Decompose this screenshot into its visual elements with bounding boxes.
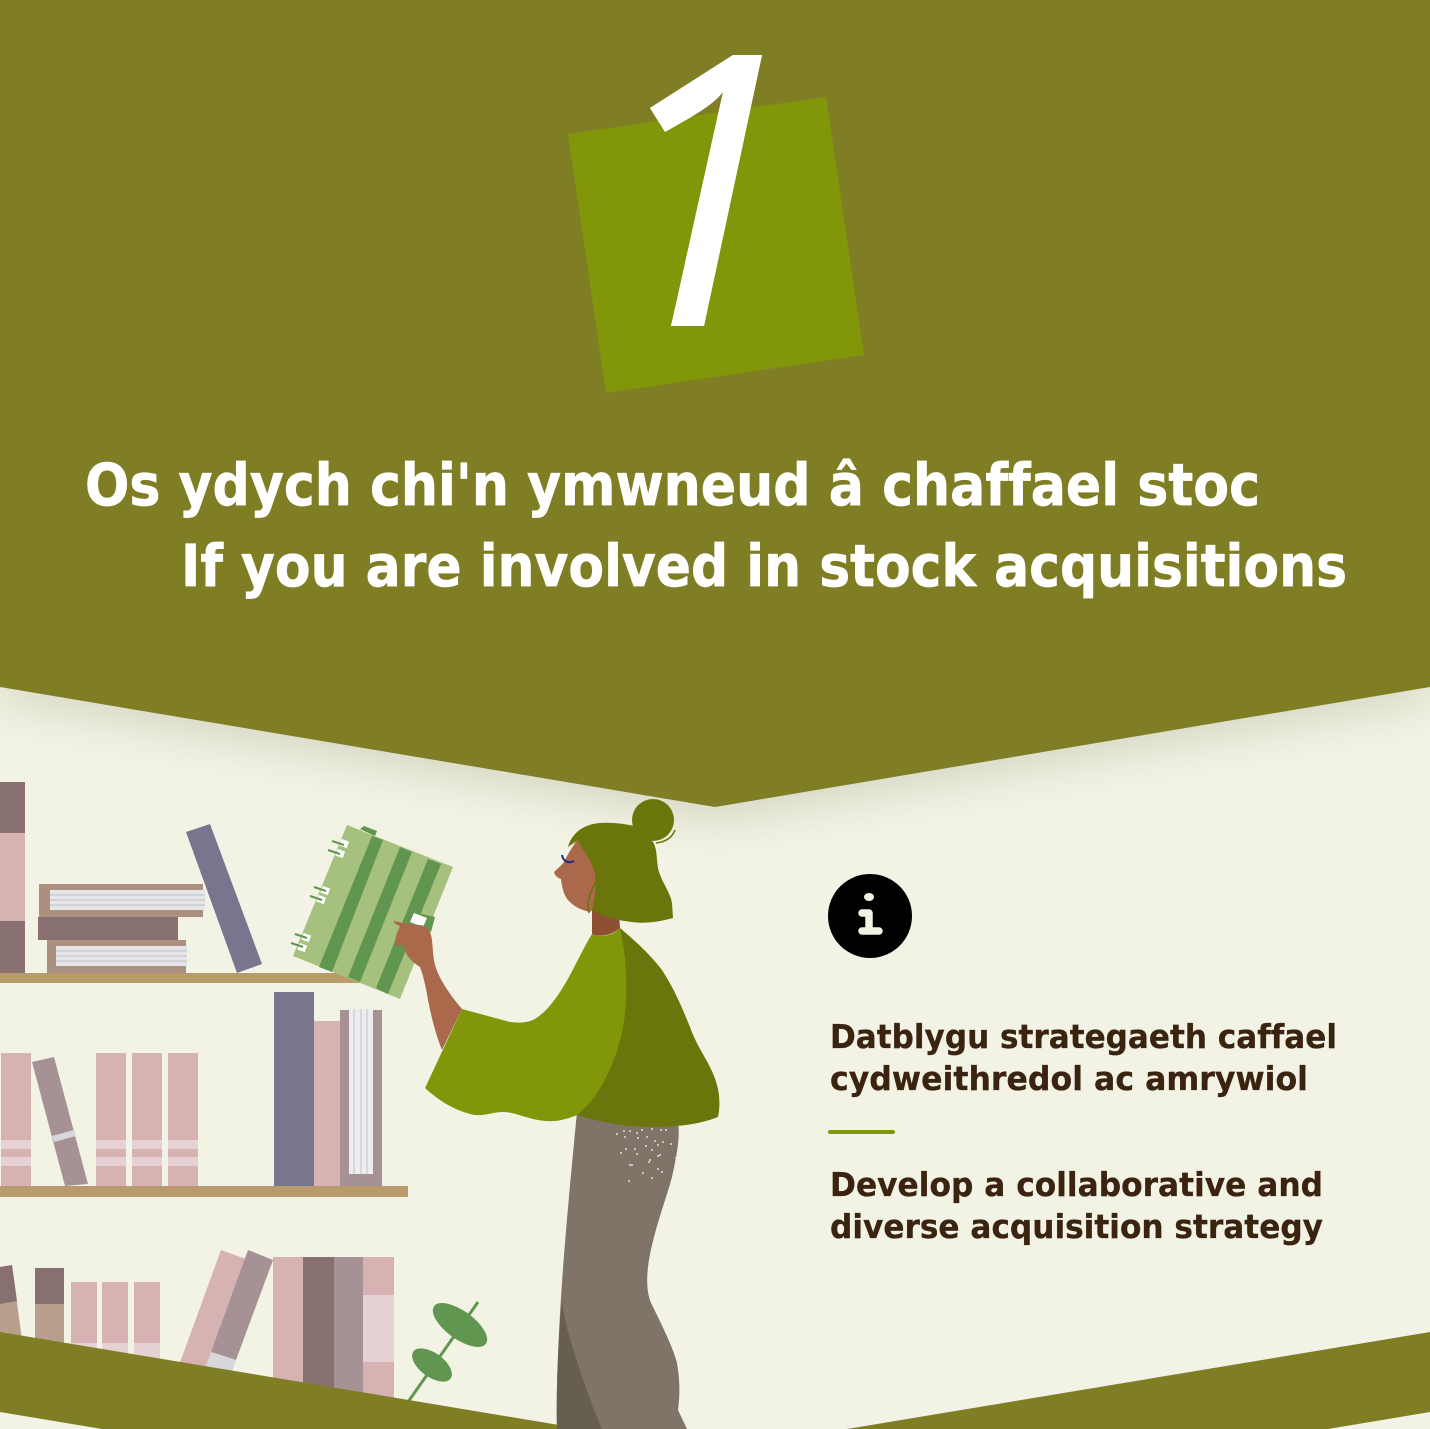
number square [568,97,864,393]
eyelash [562,855,574,862]
shelf 2 books [1,992,382,1186]
hair [568,823,673,923]
header chevron [0,0,1430,807]
English body text: Develop a collaborative and [830,1165,1323,1204]
shelf 1 [0,973,406,983]
heading: Os ydych chi'n ymwneud â chaffael stoc [85,451,1260,519]
trousers [557,1112,687,1429]
cape front [425,928,626,1121]
neck [592,908,620,936]
divider [828,1130,895,1134]
notebook [291,825,453,999]
Welsh body text: Datblygu strategaeth caffael [830,1017,1337,1056]
Welsh body text: cydweithredol ac amrywiol [830,1059,1308,1098]
English body text [830,1165,1323,1246]
chevron shadow [0,660,1430,820]
shelf 2 [0,1186,408,1197]
stacked books [38,884,205,973]
arm and hand [393,921,462,1050]
plant [406,1295,494,1402]
Welsh body text [830,1017,1337,1098]
cape back [577,928,719,1127]
woman [393,799,719,1429]
info icon [828,874,912,958]
left tall book [0,782,25,973]
face [554,838,600,912]
shelf 3 books [0,1250,394,1400]
bookshelf [0,782,408,1400]
leaning book [186,824,262,973]
hair strands [588,830,675,913]
heading [85,451,1347,600]
bun [632,799,674,841]
English body text: diverse acquisition strategy [830,1207,1323,1246]
bottom chevron band [0,1332,1430,1429]
